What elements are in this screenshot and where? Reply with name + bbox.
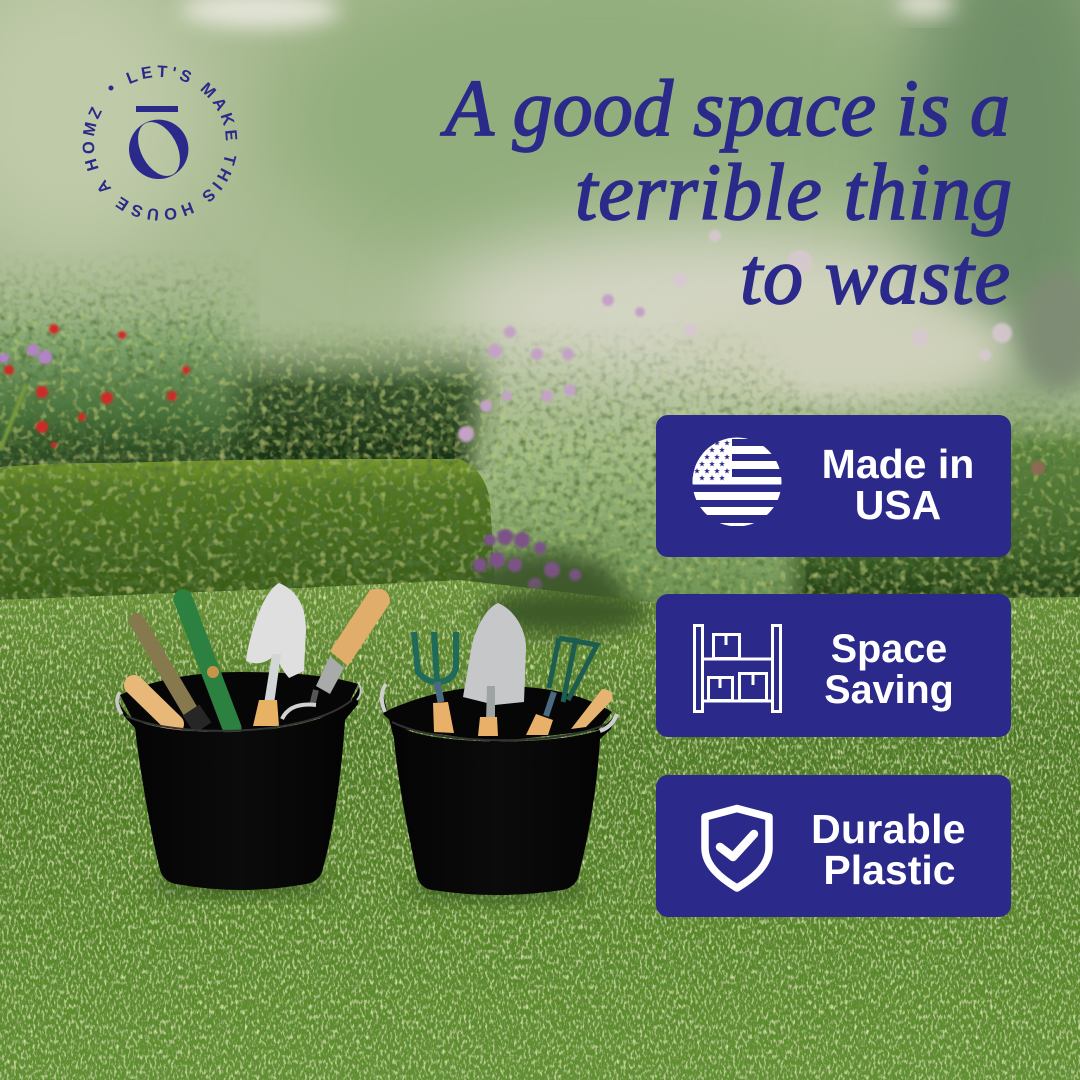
panel: durable plastic <box>656 775 1011 917</box>
dark foliage behind hedge <box>190 320 500 470</box>
wooden stub <box>571 689 613 729</box>
panel: space saving <box>656 594 1011 737</box>
left hedge <box>0 459 495 600</box>
logo dot <box>108 86 114 90</box>
cultivator grip <box>526 714 553 735</box>
label: Plastic <box>823 847 956 893</box>
label <box>822 441 974 528</box>
label: Made in <box>822 441 974 487</box>
cultivator <box>546 638 597 716</box>
bucket interior <box>120 672 358 736</box>
bucket handles <box>382 684 617 731</box>
green handle tool <box>183 599 232 728</box>
left bucket with tools <box>116 583 390 890</box>
panel: made in usa <box>656 415 1011 557</box>
light green plants <box>455 320 805 610</box>
label <box>811 806 966 893</box>
icon: shelf with boxes <box>694 626 780 712</box>
headline: A good space is a <box>440 65 1010 153</box>
headline: terrible thing <box>575 149 1012 237</box>
right bucket with tools <box>380 603 617 895</box>
bucket handles <box>117 692 122 714</box>
rim highlight <box>126 700 352 731</box>
icon: shield check <box>705 808 769 888</box>
lawn <box>0 580 1080 1080</box>
wooden handle tool <box>134 685 174 724</box>
shrub base over lawn <box>480 588 650 636</box>
logo badge <box>82 65 238 221</box>
bucket body <box>116 683 361 890</box>
bucket body <box>380 690 615 895</box>
label <box>824 627 954 712</box>
foliage masses <box>0 0 1080 410</box>
brown handle tool <box>137 621 203 728</box>
label: Saving <box>824 668 954 712</box>
headline: to waste <box>740 233 1010 321</box>
label: USA <box>855 482 941 528</box>
label: Space <box>831 627 947 671</box>
rim highlight <box>392 722 606 740</box>
left shrub flowers <box>0 324 190 450</box>
headline <box>440 65 1012 321</box>
icon: US flag <box>690 436 785 526</box>
left shrub foliage <box>0 250 260 470</box>
white trowel <box>246 583 306 726</box>
fork wooden grip <box>433 702 454 733</box>
pruner with wooden grip <box>282 589 390 719</box>
garden flowers <box>458 230 1045 628</box>
right hedge <box>760 380 1080 600</box>
label: Durable <box>811 806 966 852</box>
macron bar <box>136 106 178 112</box>
circular tagline: LET'S MAKE THIS HOUSE A HOMZ <box>82 65 238 221</box>
grey trowel <box>463 603 526 736</box>
hand fork <box>414 632 456 702</box>
letter o <box>129 120 188 179</box>
bucket interior <box>384 686 612 742</box>
